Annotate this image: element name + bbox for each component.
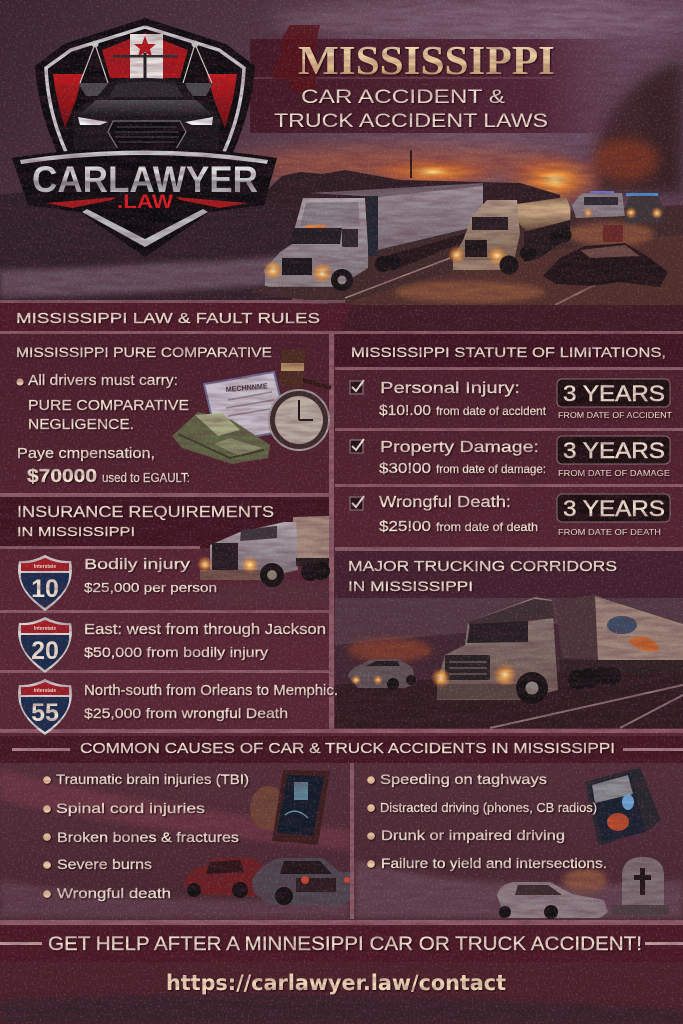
background: content panels xyxy=(0,332,683,1024)
illustration: box truck xyxy=(197,516,330,608)
illustration: crashed cars xyxy=(184,858,350,906)
clock xyxy=(269,390,329,450)
list: injuries: Spinal cord injuries xyxy=(56,800,205,816)
illustration: smartphone xyxy=(250,770,330,845)
text: north south corridor: North-south from Orleans to Memphic. xyxy=(84,683,338,699)
title: Mississippi: MISSISSIPPI xyxy=(298,37,555,83)
panel: pure comparative xyxy=(16,345,272,486)
text: property damage: from date of damage: xyxy=(436,462,546,476)
icon: interstate 10 shield xyxy=(18,555,72,611)
icon: interstate 10 shield: 10 xyxy=(31,575,59,603)
background: stormy header scene xyxy=(0,0,683,305)
logo text: CARLAWYER: CARLAWYER xyxy=(32,159,258,200)
illustration: tanker truck xyxy=(448,197,572,274)
subtitle xyxy=(274,87,548,132)
trailer xyxy=(555,595,683,663)
car front xyxy=(72,78,220,150)
text: amount xyxy=(27,466,190,486)
row: property damage xyxy=(350,436,670,478)
list: injuries xyxy=(43,772,249,901)
shield body xyxy=(35,18,255,155)
icon: Mississippi state silhouette xyxy=(272,25,320,92)
list: causes xyxy=(367,771,607,871)
text: property damage: $30!00 xyxy=(379,460,431,477)
text: property damage xyxy=(379,439,546,477)
text: property damage: Property Damage: xyxy=(380,439,539,456)
list: injuries: Traumatic brain injuries (TBI) xyxy=(56,772,249,787)
text: wrongful death: Wrongful Death: xyxy=(379,494,511,511)
panel dividers xyxy=(0,331,683,945)
icon: checkbox xyxy=(350,380,364,394)
text: bodily injury: $25,000 per person xyxy=(84,580,217,595)
illustration: documents, gavel, clock and cash xyxy=(172,349,331,464)
text: north south corridor: $25,000 from wrongful Death xyxy=(84,705,288,721)
illustration: corridor truck and police car xyxy=(348,595,683,704)
badge: 3 years: 3 YEARS xyxy=(563,438,665,463)
certificate xyxy=(204,372,288,444)
gavel xyxy=(279,349,331,388)
heading: insurance requirements xyxy=(17,504,274,539)
text: east west corridor: $50,000 from bodily injury xyxy=(84,644,268,660)
row: wrongful death xyxy=(350,494,670,537)
illustration: tombstone xyxy=(612,857,669,915)
text: negligence rule: PURE COMPARATIVE xyxy=(28,397,189,414)
text: all drivers: All drivers must carry: xyxy=(28,372,178,389)
text: personal injury: $10!.00 xyxy=(379,402,431,419)
list: injuries: Broken bones & fractures xyxy=(57,829,239,845)
text: east west corridor xyxy=(84,621,326,660)
icon: checkbox xyxy=(350,496,364,510)
icon: interstate 55 shield: 55 xyxy=(31,699,59,727)
illustration: car wreck xyxy=(543,243,668,287)
heading: major trucking corridors: MAJOR TRUCKING CORRIDORS xyxy=(348,558,617,575)
list: injuries: Wrongful death xyxy=(57,885,171,901)
icon: interstate 20 shield xyxy=(18,617,72,673)
subtitle: CAR ACCIDENT & xyxy=(301,87,505,108)
text: bodily injury xyxy=(84,556,217,595)
heading: statute of limitations: MISSISSIPPI STATUTE OF LIMITATIONS, xyxy=(351,345,666,360)
badge: 3 years: 3 YEARS xyxy=(563,496,665,521)
cash stacks xyxy=(172,412,270,464)
icon: interstate 55 shield: Interstate xyxy=(34,688,56,694)
text: wrongful death: from date of death xyxy=(436,520,538,534)
heading: insurance requirements: IN MISSISSIPPI xyxy=(17,524,135,539)
illustration: tablet xyxy=(585,767,661,845)
text: amount: used to EGAULT: xyxy=(102,470,190,485)
caption: FROM DATE OF ACCIDENT xyxy=(558,411,672,420)
illustration: silver semi truck xyxy=(263,183,483,291)
call to action: GET HELP AFTER A MINNESIPPI CAR OR TRUCK ACCIDENT! xyxy=(48,934,642,955)
icon: interstate 10 shield: Interstate xyxy=(34,564,56,570)
list: causes: Distracted driving (phones, CB radios) xyxy=(380,800,597,815)
text: wrongful death xyxy=(379,494,538,535)
heading: insurance requirements: INSURANCE REQUIREMENTS xyxy=(17,504,274,521)
text: negligence rule: NEGLIGENCE. xyxy=(28,416,134,433)
icon: interstate 55 shield xyxy=(18,679,72,735)
text: personal injury: from date of accident xyxy=(436,404,547,418)
caption: FROM DATE OF DAMAGE xyxy=(558,469,670,478)
list: causes: Speeding on taghways xyxy=(380,771,547,787)
icon: interstate 20 shield: Interstate xyxy=(34,626,56,632)
heading: common causes: COMMON CAUSES OF CAR & TRUCK ACCIDENTS IN MISSISSIPPI xyxy=(80,741,615,757)
text: negligence rule xyxy=(28,397,189,433)
caption: FROM DATE OF DEATH xyxy=(558,528,661,537)
text: personal injury: Personal Injury: xyxy=(380,380,520,397)
police car xyxy=(348,659,416,690)
badge: 3 years: 3 YEARS xyxy=(563,381,665,406)
row: personal injury xyxy=(350,379,672,420)
illustration: police cars xyxy=(572,191,664,242)
text: bodily injury: Bodily injury xyxy=(84,556,191,573)
logo: CarLawyer.law shield xyxy=(12,18,277,257)
icon: checkbox xyxy=(350,439,364,453)
link: contact url: https://carlawyer.law/contact xyxy=(166,971,506,995)
subtitle: TRUCK ACCIDENT LAWS xyxy=(274,111,548,132)
illustration: documents, gavel, clock and cash: MECHNNME xyxy=(225,381,268,394)
text: east west corridor: East: west from through Jackson xyxy=(84,621,326,638)
text: wrongful death: $25!00 xyxy=(379,518,431,535)
bullet xyxy=(16,378,24,386)
text: personal injury xyxy=(379,380,547,419)
list: causes: Drunk or impaired driving xyxy=(381,827,565,843)
illustration: wrecked car xyxy=(497,868,608,919)
heading: pure comparative: MISSISSIPPI PURE COMPARATIVE xyxy=(16,345,272,360)
banner xyxy=(12,148,277,257)
section banner: law and fault rules: MISSISSIPPI LAW & FAULT RULES xyxy=(16,311,320,327)
cab xyxy=(437,597,558,700)
corridor scene background xyxy=(335,598,683,728)
text: compensation: Paye cmpensation, xyxy=(17,445,155,462)
section banner: law and fault rules xyxy=(0,300,353,332)
heading: major trucking corridors xyxy=(348,558,617,594)
icon: interstate 20 shield: 20 xyxy=(31,637,59,665)
title band xyxy=(250,39,650,133)
logo text: .LAW: .LAW xyxy=(117,192,173,213)
list: injuries: Severe burns xyxy=(57,856,152,872)
list: causes: Failure to yield and intersections. xyxy=(381,856,607,871)
text: north south corridor xyxy=(84,683,338,721)
heading: major trucking corridors: IN MISSISSIPPI xyxy=(348,578,473,594)
text: amount: $70000 xyxy=(27,466,97,486)
